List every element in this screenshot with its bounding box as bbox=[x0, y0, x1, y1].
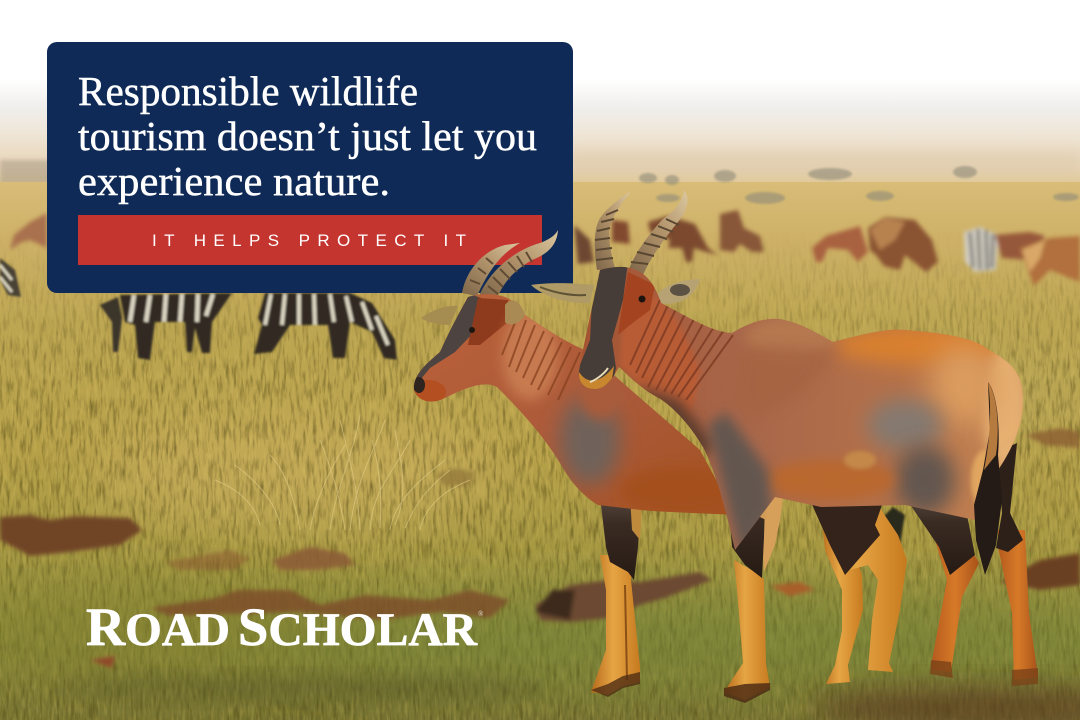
logo: Road Scholar: SCHOLAR bbox=[238, 597, 478, 657]
right ear bbox=[505, 300, 525, 324]
zebras grazing bbox=[0, 258, 905, 545]
horns bbox=[462, 230, 558, 298]
heading: Responsible wildlife bbox=[78, 68, 418, 114]
left ear bbox=[421, 306, 458, 325]
distant herd of antelope and wildebeest bbox=[10, 210, 1080, 286]
head and body bbox=[578, 266, 1023, 550]
heading: experience nature. bbox=[78, 158, 390, 204]
heading bbox=[78, 68, 537, 204]
hind legs bbox=[810, 500, 907, 684]
blaze on face bbox=[578, 262, 628, 392]
panel: headline card bbox=[47, 42, 573, 293]
mounds of red earth bbox=[0, 428, 1080, 668]
distant tree line and far animals bbox=[639, 166, 1079, 204]
dry grass tuft bbox=[215, 415, 470, 530]
logo: Road Scholar: ® bbox=[478, 610, 484, 618]
banner: it helps protect it bbox=[78, 215, 542, 265]
far hind leg bbox=[996, 443, 1038, 686]
heading: tourism doesn’t just let you bbox=[78, 113, 537, 159]
horns bbox=[595, 190, 688, 275]
neck wrinkles bbox=[630, 300, 733, 400]
antelope in front bbox=[531, 190, 1040, 703]
head and body bbox=[414, 294, 726, 514]
antelope in back bbox=[400, 230, 907, 697]
near front leg bbox=[724, 470, 770, 703]
eye bbox=[469, 327, 475, 333]
tail bbox=[974, 382, 1002, 575]
front leg bbox=[591, 480, 642, 697]
ears bbox=[531, 279, 700, 304]
banner: it helps protect it: IT HELPS PROTECT IT bbox=[152, 231, 466, 250]
far front leg bbox=[762, 490, 784, 572]
shading on the body bbox=[620, 280, 1027, 560]
logo: Road Scholar bbox=[86, 597, 484, 657]
near hind leg bbox=[900, 480, 979, 678]
logo: Road Scholar: ROAD bbox=[86, 597, 230, 657]
